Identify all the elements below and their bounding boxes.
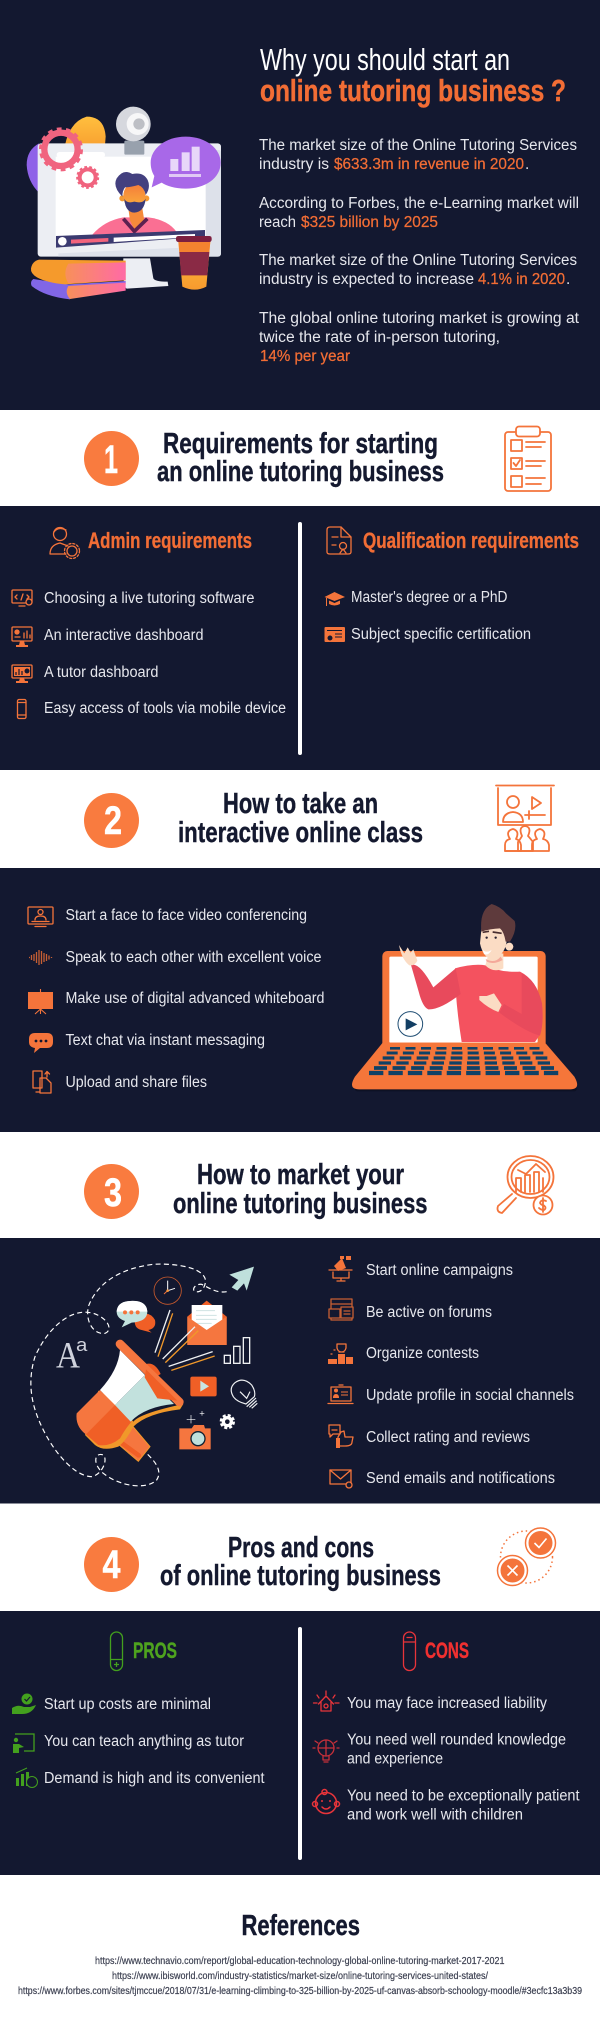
speech bubble with chart [151, 137, 221, 189]
heading 1: an online tutoring business [157, 456, 444, 488]
list item: rating and reviews [329, 1425, 530, 1448]
gears [41, 129, 98, 188]
panel: marketing [0, 1238, 600, 1502]
panel: pros and cons [0, 1611, 600, 1875]
heading 3: How to market your [197, 1159, 404, 1191]
list item: online campaigns [329, 1256, 513, 1281]
con: patience with children: You need to be exceptionally patient [347, 1788, 580, 1804]
illustration: megaphone with marketing icons [31, 1264, 257, 1486]
cons heading with thermometer icon [404, 1632, 469, 1670]
divider [298, 1627, 302, 1860]
list item: interactive dashboard [12, 627, 204, 647]
illustration: monitor with tutor, gears, webcam, books and coffee [27, 107, 221, 299]
cons heading with thermometer icon: CONS [425, 1638, 469, 1663]
section header 1 [0, 410, 600, 506]
list item: online campaigns: Start online campaigns [366, 1262, 513, 1279]
list item: whiteboard [28, 989, 324, 1014]
heading: admin requirements: Admin requirements [88, 528, 252, 553]
laptop keyboard [352, 1043, 577, 1089]
list item: contests: Organize contests [366, 1345, 479, 1362]
heading 4: Pros and cons [228, 1532, 374, 1564]
heading 2 [178, 788, 423, 849]
section header 4 [0, 1502, 600, 1611]
stat: global growth: twice the rate of in-person tutoring, [259, 329, 500, 346]
list item: live tutoring software: Choosing a live tutoring software [44, 590, 254, 607]
list item: files [33, 1071, 207, 1093]
number badge 1: 1 [104, 438, 118, 482]
progress bar [56, 230, 205, 248]
video icon [190, 1377, 217, 1396]
stat: market size: The market size of the Online Tutoring Services [259, 137, 577, 154]
heading 2: How to take an [223, 788, 378, 820]
heading 2: interactive online class [178, 817, 423, 849]
number badge 1 [84, 431, 139, 486]
webcam [116, 107, 151, 155]
stat: expected increase: 4.1% in 2020 [478, 271, 565, 288]
stat: market size: industry is [259, 156, 329, 173]
chat bubbles [117, 1301, 155, 1333]
heading 1: Requirements for starting [163, 428, 438, 460]
pro: teach anything: You can teach anything as tutor [44, 1733, 244, 1750]
list item: contests [328, 1344, 479, 1364]
paper plane [229, 1267, 254, 1291]
list item: whiteboard: Make use of digital advanced whiteboard [66, 990, 324, 1007]
list item: social profile: Update profile in social channels [366, 1387, 574, 1404]
stat: e-learning market [259, 195, 579, 231]
reference links [18, 1956, 582, 1997]
section header 2 [0, 770, 600, 868]
list item: degree: Master's degree or a PhD [351, 589, 508, 606]
motion lines [155, 1310, 215, 1370]
stat: e-learning market: reach [259, 214, 296, 231]
con: patience with children [312, 1788, 580, 1824]
presenter [399, 904, 543, 1042]
illustration: laptop with presenter [352, 904, 577, 1091]
books [31, 260, 126, 299]
heading 1 [157, 428, 444, 488]
number badge 4: 4 [102, 1543, 121, 1587]
icon: presenter and audience [496, 786, 554, 851]
list item: voice: Speak to each other with excellent voice [66, 949, 322, 966]
list item: rating and reviews: Collect rating and reviews [366, 1429, 530, 1446]
list item: mobile device: Easy access of tools via mobile device [44, 700, 286, 717]
pro: start up costs: Start up costs are minimal [44, 1696, 211, 1713]
list item: tutor dashboard [12, 664, 158, 683]
list item: video conferencing: Start a face to face video conferencing [66, 907, 307, 924]
heading 4 [160, 1532, 441, 1592]
number badge 2: 2 [104, 799, 122, 843]
panel: requirements [0, 506, 600, 770]
stat: market size: $633.3m in revenue in 2020 [334, 156, 524, 173]
con: knowledge: and experience [347, 1750, 443, 1768]
con: liability [314, 1691, 547, 1712]
pros heading with thermometer icon [110, 1632, 177, 1670]
panel: intro [0, 0, 600, 410]
divider [298, 522, 302, 755]
list item: tutor dashboard: A tutor dashboard [44, 664, 158, 681]
letter symbols: A [56, 1334, 80, 1375]
icon: qualification document [327, 527, 351, 554]
stat: global growth: The global online tutoring market is growing at [259, 310, 580, 327]
reference links: https://www.technavio.com/report/global-education-technology-global-online-tutoring-market-2017-2021 [95, 1956, 505, 1967]
list item: forums: Be active on forums [366, 1304, 492, 1321]
references heading: References [242, 1910, 360, 1942]
list item: text chat: Text chat via instant messaging [66, 1032, 265, 1049]
pros heading with thermometer icon: PROS [133, 1638, 177, 1663]
reference links: https://www.ibisworld.com/industry-statistics/market-size/online-tutoring-services-united-states/ [112, 1971, 488, 1982]
pro: start up costs [12, 1694, 211, 1714]
list item: files: Upload and share files [66, 1074, 207, 1091]
lightbulb [231, 1380, 257, 1408]
envelope [187, 1301, 227, 1345]
panel: interactive class [0, 868, 600, 1132]
heading 4: of online tutoring business [160, 1560, 441, 1592]
coffee cup [176, 236, 212, 290]
con: knowledge [313, 1732, 566, 1768]
stat: e-learning market: According to Forbes, the e-Learning market will [259, 195, 579, 212]
megaphone [76, 1344, 183, 1461]
icon: magnifier with chart and dollar [498, 1156, 554, 1214]
heading 3 [173, 1159, 428, 1220]
section header 3 [0, 1132, 600, 1238]
tutor figure [92, 172, 177, 235]
letter symbols: a [76, 1334, 88, 1355]
icon: clipboard checklist [505, 426, 551, 491]
clock [154, 1277, 181, 1304]
stat: expected increase [259, 252, 577, 288]
con: knowledge: You need well rounded knowledge [347, 1732, 566, 1748]
number badge 4 [84, 1537, 139, 1592]
heading 3: online tutoring business [173, 1188, 428, 1220]
list item: text chat [29, 1032, 265, 1053]
number badge 3 [84, 1164, 139, 1219]
bar chart icon [224, 1338, 250, 1363]
icon: check and cross badges [498, 1528, 556, 1586]
stat: global growth: 14% per year [260, 348, 350, 365]
dashed flight path [31, 1264, 227, 1486]
panel: references [0, 1875, 600, 2040]
pro: teach anything [13, 1733, 244, 1753]
con: patience with children: and work well with children [347, 1806, 523, 1824]
stat: market size: . [525, 156, 529, 173]
stat: expected increase: The market size of the Online Tutoring Services [259, 252, 577, 269]
number badge 3: 3 [104, 1171, 122, 1215]
play button [398, 1012, 423, 1036]
settings gear [221, 1415, 234, 1428]
camera [179, 1411, 211, 1449]
list item: forums [329, 1299, 492, 1321]
con: liability: You may face increased liability [347, 1695, 547, 1712]
stat: market size [259, 137, 577, 173]
stat: expected increase: . [566, 271, 570, 288]
title [260, 42, 566, 108]
pro: demand: Demand is high and its convenient [44, 1770, 265, 1787]
list item: emails: Send emails and notifications [366, 1470, 555, 1487]
list item: certification: Subject specific certification [351, 626, 531, 643]
stat: e-learning market: $325 billion by 2025 [301, 214, 438, 231]
number badge 2 [84, 793, 139, 848]
stat: global growth [259, 310, 580, 365]
stat: expected increase: industry is expected to increase [259, 271, 474, 288]
icon: admin person with gear [50, 528, 80, 558]
list item: interactive dashboard: An interactive dashboard [44, 627, 204, 644]
title: Why you should start an [260, 42, 510, 77]
